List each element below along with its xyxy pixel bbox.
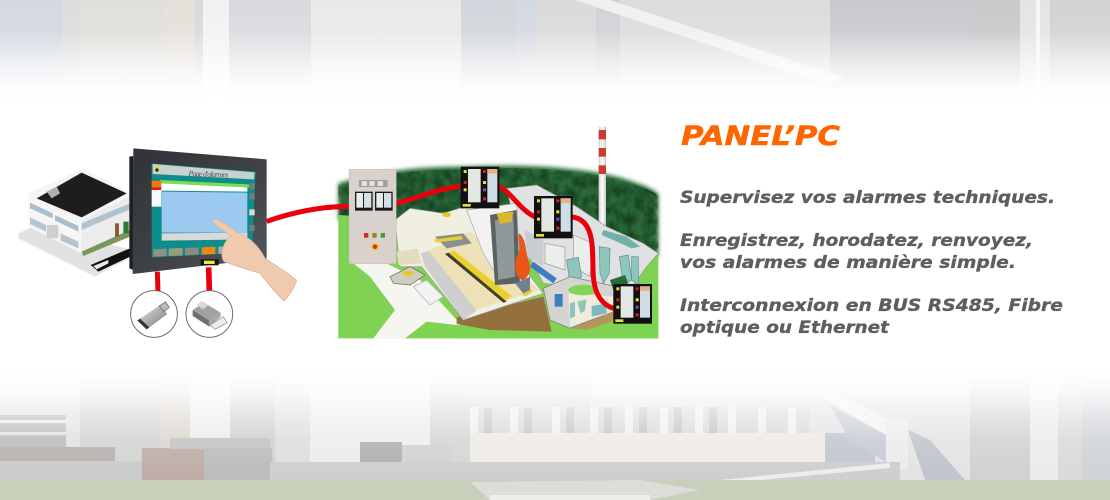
- plant: excavated earth: [457, 297, 552, 332]
- text: supervision: Supervisez vos alarmes techniques.: [680, 188, 1055, 208]
- panel PC: monitor: [129, 148, 267, 274]
- plant: flue gas treatment units: [507, 185, 658, 290]
- diagram: supervision panel with touch hand and peripherals: [18, 148, 342, 337]
- icon: USB key: [131, 291, 177, 337]
- red cable: plant network: [328, 186, 614, 309]
- alarm annunciator 1: [461, 167, 499, 208]
- icon: building: [18, 168, 132, 277]
- red cable: panel to USB key: [150, 272, 165, 292]
- plant: reception hall: [390, 205, 543, 320]
- red cable: panel to printer: [200, 267, 218, 291]
- chimney: [599, 127, 606, 227]
- background: power plant photo, bottom band: [0, 372, 1110, 500]
- alarm annunciator 3: [613, 284, 652, 324]
- text: interconnection: optique ou Ethernet: [680, 318, 890, 338]
- text: interconnection: [680, 296, 1063, 338]
- title: PANEL’PC: [681, 121, 840, 152]
- screen title: Page d'alarmes: [187, 169, 229, 179]
- plant: lawn: [338, 210, 658, 338]
- plant: roads and ground: [353, 263, 460, 338]
- text: recording: [680, 231, 1033, 273]
- plant: boiler building: [467, 203, 530, 293]
- plant: underground rooms: [543, 275, 628, 330]
- background: power plant photo, top band: [0, 0, 1110, 104]
- diagram: industrial plant cutaway: [328, 127, 658, 338]
- text: recording: Enregistrez, horodatez, renvoyez,: [680, 231, 1033, 251]
- control cabinet: [349, 169, 396, 264]
- icon: printer: [186, 291, 233, 337]
- hand touching the screen: [212, 219, 297, 301]
- text: interconnection: Interconnexion en BUS RS485, Fibre: [680, 296, 1063, 316]
- plant: forest backdrop: [338, 163, 658, 257]
- text: recording: vos alarmes de manière simple.: [680, 253, 1016, 273]
- red cable: panel to plant: [267, 207, 342, 221]
- alarm annunciator 2: [534, 196, 573, 238]
